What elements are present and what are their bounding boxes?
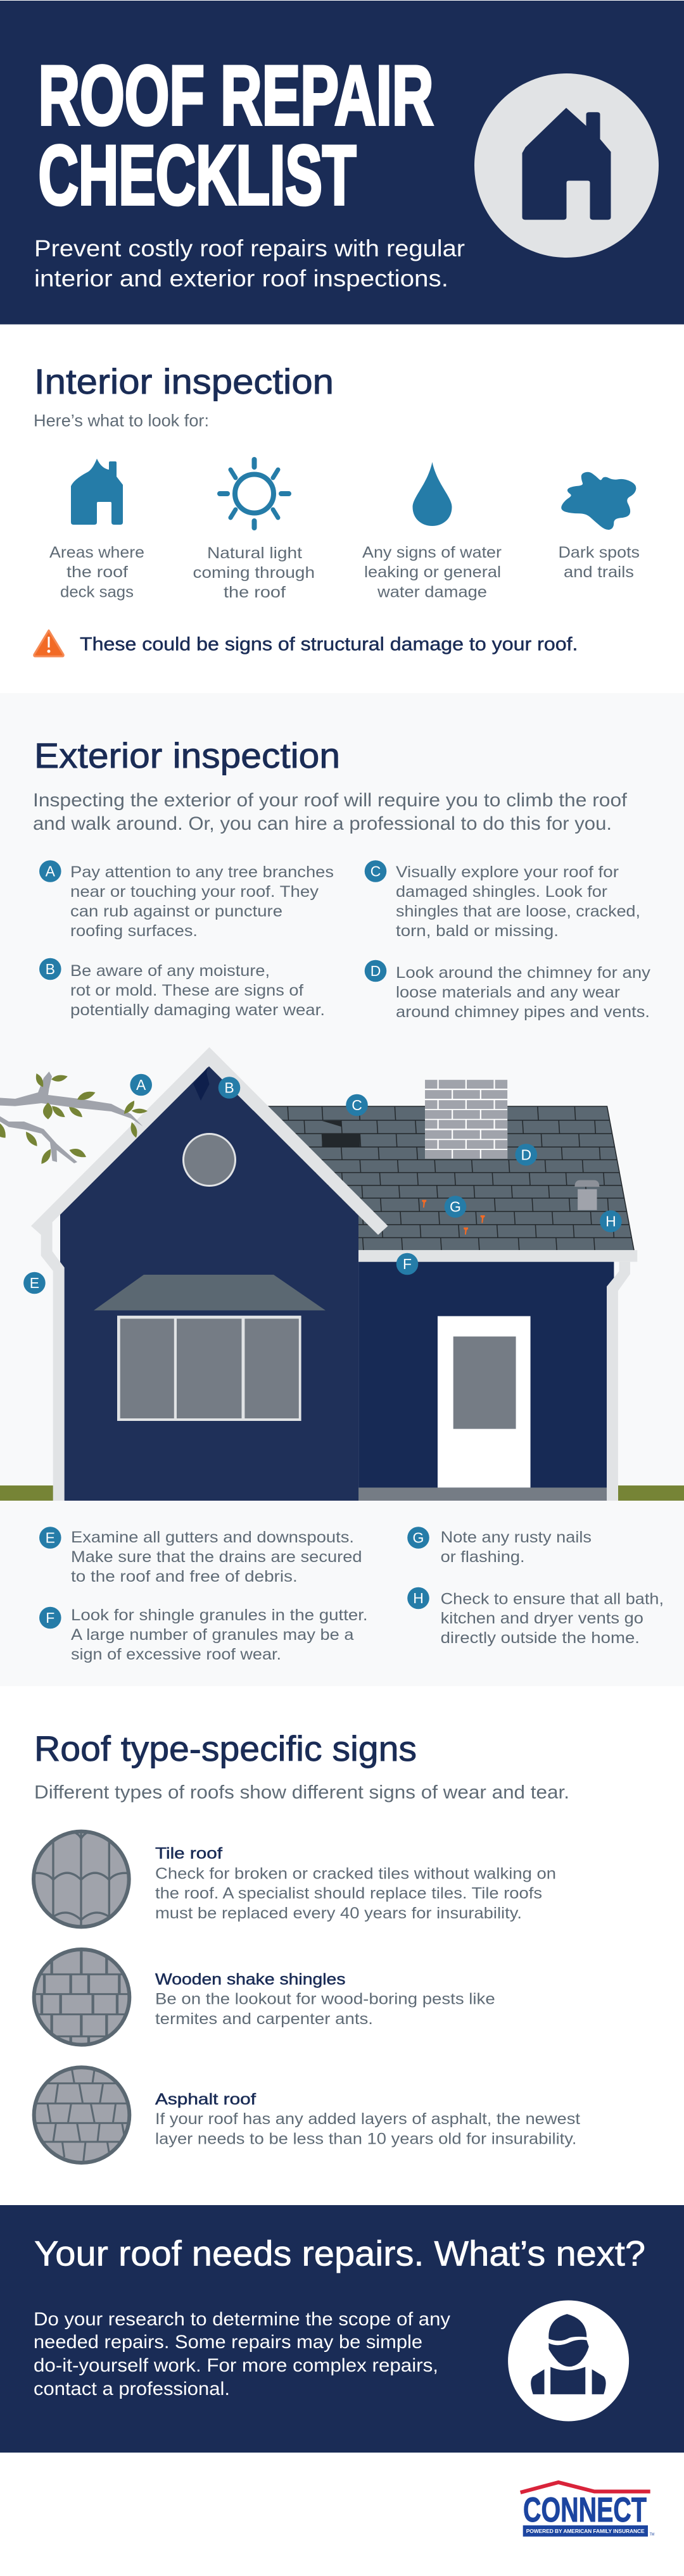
item B: B	[46, 961, 55, 977]
item G: or flashing.	[441, 1548, 524, 1566]
item F: F	[46, 1610, 54, 1626]
marker A: A	[136, 1077, 146, 1093]
item A	[39, 860, 334, 940]
icon: house in circle	[474, 73, 659, 258]
marker G	[445, 1196, 466, 1218]
captions: the roof	[224, 584, 286, 601]
item C: damaged shingles. Look for	[396, 883, 607, 901]
text: tile roof: the roof. A specialist should replace tiles. Tile roofs	[155, 1885, 542, 1903]
marker F	[396, 1253, 418, 1275]
heading: roof type-specific signs: Roof type-specific signs	[34, 1729, 417, 1768]
title: ROOF REPAIR	[38, 49, 433, 143]
icon: dark spot	[562, 473, 635, 529]
text: exterior intro: Inspecting the exterior of your roof will require you to climb the roof	[33, 790, 628, 811]
text: next steps body: needed repairs. Some repairs may be simple	[34, 2332, 422, 2353]
item H: kitchen and dryer vents go	[441, 1610, 643, 1627]
text: exterior intro	[33, 790, 628, 834]
marker D: D	[521, 1146, 531, 1163]
text: asphalt roof: Asphalt roof	[155, 2091, 256, 2108]
text: next steps body: Do your research to determine the scope of any	[34, 2309, 450, 2330]
icon: sagging house	[71, 459, 123, 525]
text: wooden shake shingles	[155, 1971, 495, 2028]
rusty nails	[422, 1200, 485, 1235]
chimney	[425, 1080, 507, 1159]
captions: Dark spots	[559, 544, 640, 561]
item G: Note any rusty nails	[441, 1529, 592, 1546]
marker G: G	[450, 1199, 461, 1215]
text: tile roof	[155, 1845, 556, 1922]
item D: D	[370, 963, 381, 979]
item A: near or touching your roof. They	[70, 883, 319, 901]
item A: can rub against or puncture	[70, 903, 282, 920]
logo roof	[521, 2482, 650, 2492]
subtitle: interior and exterior roof inspections.	[34, 266, 448, 292]
text: asphalt roof	[155, 2091, 580, 2148]
text: wooden shake shingles: termites and carpenter ants.	[155, 2010, 373, 2028]
item H	[407, 1587, 664, 1647]
text: next steps body: do-it-yourself work. For more complex repairs,	[34, 2355, 438, 2376]
captions: deck sags	[60, 584, 134, 601]
marker B	[218, 1077, 240, 1099]
icon: sun	[220, 460, 289, 528]
text: exterior intro: and walk around. Or, you can hire a professional to do this for you.	[33, 813, 612, 834]
icon: water drop	[413, 462, 452, 526]
subtitle: Prevent costly roof repairs with regular	[34, 235, 465, 261]
marker D	[516, 1144, 537, 1166]
captions: coming through	[193, 564, 315, 582]
tree branch	[0, 1072, 148, 1164]
captions: Any signs of water	[362, 544, 502, 561]
captions: water damage	[377, 584, 487, 601]
step	[358, 1487, 607, 1501]
text: tile roof: Tile roof	[155, 1845, 222, 1863]
door	[438, 1316, 531, 1487]
roof leak stain	[193, 1067, 210, 1101]
item B: potentially damaging water wear.	[70, 1001, 325, 1019]
item C: C	[370, 863, 381, 880]
icon: roofer	[508, 2300, 629, 2422]
logo: connect	[521, 2482, 654, 2537]
item F: Look for shingle granules in the gutter.	[71, 1606, 368, 1624]
item E	[39, 1527, 362, 1585]
captions: Areas where	[49, 544, 144, 561]
marker A	[130, 1074, 152, 1096]
item G	[407, 1527, 592, 1566]
item H: Check to ensure that all bath,	[441, 1590, 664, 1608]
icon: tile roof	[32, 1832, 131, 1927]
marker H: H	[605, 1213, 616, 1230]
item A: roofing surfaces.	[70, 922, 198, 940]
item C	[365, 860, 640, 940]
captions: and trails	[564, 563, 634, 581]
round window	[184, 1134, 236, 1186]
item A: Pay attention to any tree branches	[70, 863, 334, 881]
item B: rot or mold. These are signs of	[70, 982, 303, 999]
marker C: C	[352, 1097, 362, 1113]
roof shingles	[253, 1080, 638, 1501]
logo tagline: POWERED BY AMERICAN FAMILY INSURANCE	[526, 2528, 645, 2534]
text: next steps body: contact a professional.	[34, 2379, 230, 2399]
title	[38, 49, 433, 223]
item G: G	[413, 1529, 424, 1546]
marker F: F	[403, 1256, 412, 1272]
item H: H	[413, 1590, 424, 1606]
ground	[0, 1485, 684, 1501]
right wing wall	[358, 1262, 614, 1501]
main house wall	[60, 1066, 358, 1501]
marker E: E	[30, 1275, 39, 1291]
text: asphalt roof: If your roof has any added layers of asphalt, the newest	[155, 2110, 580, 2128]
panel: exterior inspection	[0, 693, 684, 1686]
gable trim	[31, 1047, 388, 1501]
text: wooden shake shingles: Wooden shake shingles	[155, 1971, 346, 1989]
marker B: B	[224, 1080, 234, 1096]
text: tile roof: must be replaced every 40 years for insurability.	[155, 1904, 522, 1922]
callout: warning	[34, 630, 578, 656]
icon: wooden shake shingles and asphalt	[30, 1948, 135, 2163]
heading: interior inspection: Interior inspection	[34, 361, 334, 401]
marker C	[346, 1094, 368, 1116]
captions: leaking or general	[364, 563, 501, 581]
item E: Examine all gutters and downspouts.	[71, 1529, 354, 1546]
illustration: house	[0, 1047, 684, 1501]
item D: Look around the chimney for any	[396, 964, 651, 982]
heading: what's next: Your roof needs repairs. What’s next?	[34, 2234, 645, 2273]
item E: Make sure that the drains are secured	[71, 1548, 362, 1566]
item F: sign of excessive roof wear.	[71, 1646, 281, 1663]
panel: header	[0, 1, 684, 324]
text: roof types intro: Different types of roofs show different signs of wear and tear.	[34, 1782, 569, 1803]
item H: directly outside the home.	[441, 1629, 640, 1647]
captions: the roof	[66, 563, 128, 581]
damaged shingles	[322, 1121, 360, 1147]
panel: interior inspection	[34, 361, 640, 656]
captions: Natural light	[207, 544, 302, 562]
heading: exterior inspection: Exterior inspection	[34, 735, 340, 775]
panel: roof types	[30, 1729, 580, 2163]
item C: Visually explore your roof for	[396, 863, 619, 881]
marker H	[600, 1210, 622, 1232]
item D: around chimney pipes and vents.	[396, 1003, 650, 1021]
item D	[365, 960, 651, 1021]
item C: torn, bald or missing.	[396, 922, 559, 940]
awning	[94, 1275, 326, 1310]
captions	[49, 544, 640, 601]
item B: Be aware of any moisture,	[70, 962, 270, 980]
item A: A	[46, 863, 56, 880]
text: here's what to look for: Here’s what to look for:	[34, 411, 209, 430]
subtitle	[34, 235, 465, 292]
item E: E	[46, 1529, 55, 1546]
text: wooden shake shingles: Be on the lookout for wood-boring pests like	[155, 1991, 495, 2008]
title: CHECKLIST	[38, 129, 356, 223]
item C: shingles that are loose, cracked,	[396, 903, 640, 920]
trademark: TM	[650, 2533, 654, 2537]
text: next steps body	[34, 2309, 450, 2399]
vent	[574, 1180, 599, 1210]
panel: next steps	[0, 2205, 684, 2453]
item E: to the roof and free of debris.	[71, 1568, 298, 1585]
item F	[39, 1606, 368, 1663]
text: asphalt roof: layer needs to be less than 10 years old for insurability.	[155, 2130, 576, 2148]
marker E	[23, 1272, 46, 1294]
item D: loose materials and any wear	[396, 984, 620, 1001]
front window	[117, 1316, 301, 1421]
item B	[39, 958, 325, 1019]
callout: warning: These could be signs of structural damage to your roof.	[80, 634, 578, 655]
text: tile roof: Check for broken or cracked tiles without walking on	[155, 1865, 556, 1882]
item F: A large number of granules may be a	[71, 1626, 354, 1644]
gutter and downspout	[358, 1250, 637, 1501]
logo tagline	[523, 2525, 648, 2537]
